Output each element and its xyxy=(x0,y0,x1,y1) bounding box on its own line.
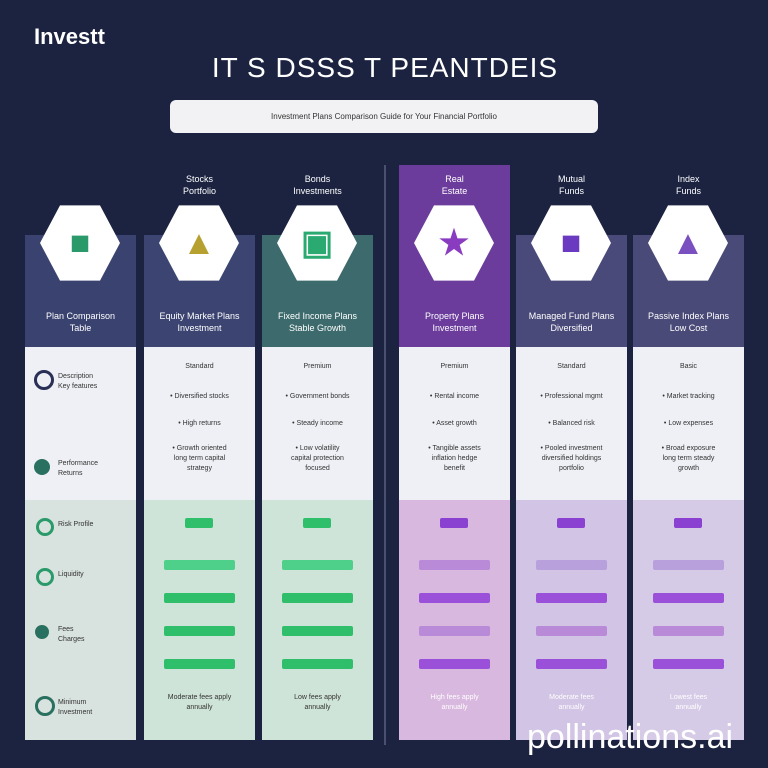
panel: column 2: focused xyxy=(305,465,330,472)
panel: column 3: ★ xyxy=(439,224,469,262)
panel: column 2: ▣ xyxy=(301,224,333,262)
panel: column 2: Bonds xyxy=(305,174,330,184)
panel: column 1 xyxy=(144,174,255,740)
panel: column 3: High fees apply xyxy=(430,694,479,701)
panel: column 3: Investment xyxy=(432,323,477,333)
panel: column 1: long term capital xyxy=(174,455,225,462)
panel: column 4: ■ xyxy=(561,224,581,262)
panel: column 5: ▲ xyxy=(671,224,705,262)
panel: column 2: • Government bonds xyxy=(286,393,349,400)
panel: column 3: Estate xyxy=(442,186,467,196)
panel: column 4: annually xyxy=(558,704,585,711)
panel: column 4: Moderate fees xyxy=(549,694,594,701)
panel: column 5: Funds xyxy=(676,186,701,196)
panel: column 4: Managed Fund Plans xyxy=(529,311,614,321)
panel: column 2: capital protection xyxy=(291,455,344,462)
panel: column 5: Index xyxy=(677,174,700,184)
panel: column 0 labels: Charges xyxy=(58,636,84,643)
panel: column 2: Low fees apply xyxy=(294,694,341,701)
panel: column 5: Basic xyxy=(680,363,697,370)
panel: column 4: Funds xyxy=(559,186,584,196)
panel: column 0 labels: Returns xyxy=(58,470,83,477)
panel: column 5: Low Cost xyxy=(670,323,707,333)
panel: column 1: annually xyxy=(186,704,213,711)
panel: column 2: annually xyxy=(304,704,331,711)
panel: column 1: Moderate fees apply xyxy=(168,694,231,701)
panel: column 5: • Low expenses xyxy=(664,420,713,427)
logo: Investt xyxy=(34,24,105,49)
panel: column 4: Diversified xyxy=(550,323,592,333)
panel: column 1: Stocks xyxy=(186,174,213,184)
panel: column 2: • Low volatility xyxy=(295,445,340,452)
panel: column 0 labels: Minimum xyxy=(58,699,86,706)
panel: column 0 labels: Liquidity xyxy=(58,571,84,578)
panel: column 0 labels: Description xyxy=(58,373,93,380)
panel: column 5: long term steady xyxy=(663,455,714,462)
panel: column 3: Real xyxy=(445,174,464,184)
panel: column 2: Fixed Income Plans xyxy=(278,311,357,321)
panel: column 1: • Diversified stocks xyxy=(170,393,229,400)
panel: column 5 xyxy=(633,174,744,740)
panel: column 2: Investments xyxy=(293,186,342,196)
panel: column 3: annually xyxy=(441,704,468,711)
panel: column 4: • Pooled investment xyxy=(540,445,602,452)
panel: column 4 xyxy=(516,174,627,740)
panel: column 2 xyxy=(262,174,373,740)
panel: column 4: • Professional mgmt xyxy=(540,393,603,400)
panel: column 4: • Balanced risk xyxy=(548,420,595,427)
panel: column 5: annually xyxy=(675,704,702,711)
panel: column 0 labels: Risk Profile xyxy=(58,521,93,528)
panel: column 1: ▲ xyxy=(182,224,216,262)
icons left xyxy=(34,370,54,390)
panel: column 4: portfolio xyxy=(559,465,584,472)
panel: column 1: • Growth oriented xyxy=(172,445,227,452)
panel: column 3: • Rental income xyxy=(430,393,479,400)
panel: column 1: strategy xyxy=(187,465,212,472)
panel: column 0 labels: Key features xyxy=(58,383,97,390)
panel: column 3: Property Plans xyxy=(425,311,484,321)
panel: column 4: diversified holdings xyxy=(542,455,601,462)
panel: column 1: Investment xyxy=(177,323,222,333)
panel: column 2: Stable Growth xyxy=(289,323,346,333)
panel: column 0 labels: Table xyxy=(70,323,91,333)
panel: column 1: Equity Market Plans xyxy=(159,311,240,321)
title: IT S DSSS T PEANTDEIS xyxy=(212,52,558,83)
panel: column 4: Mutual xyxy=(558,174,585,184)
panel: column 5: Lowest fees xyxy=(670,694,707,701)
panel: column 0 labels xyxy=(25,205,136,740)
panel: column 3: inflation hedge xyxy=(432,455,477,462)
panel: column 3 xyxy=(399,165,510,740)
panel: column 0 labels: ■ xyxy=(70,224,90,262)
panel: column 3: benefit xyxy=(444,465,465,472)
panel: column 0 labels: Plan Comparison xyxy=(46,311,115,321)
panel: column 5: growth xyxy=(678,465,699,472)
panel: column 0 labels: Performance xyxy=(58,460,98,467)
panel: column 1: Standard xyxy=(185,363,214,370)
watermark: pollinations.ai xyxy=(527,718,733,756)
panel: column 0 labels: Fees xyxy=(58,626,74,633)
panel: column 1: • High returns xyxy=(178,420,221,427)
panel: column 3: • Asset growth xyxy=(432,420,477,427)
search bar: Investment Plans Comparison Guide for Your Financial Portfolio xyxy=(271,112,497,121)
panel: column 2: • Steady income xyxy=(292,420,343,427)
panel: column 5: • Market tracking xyxy=(662,393,715,400)
panel: column 4: Standard xyxy=(557,363,586,370)
panel: column 5: Passive Index Plans xyxy=(648,311,729,321)
panel: column 3: Premium xyxy=(440,363,468,370)
search bar xyxy=(170,100,598,133)
panel: column 5: • Broad exposure xyxy=(662,445,715,452)
panel: column 3: • Tangible assets xyxy=(428,445,481,452)
panel: column 1: Portfolio xyxy=(183,186,216,196)
panel: column 2: Premium xyxy=(303,363,332,370)
panel: column 0 labels: Investment xyxy=(58,709,92,716)
divider line xyxy=(384,165,386,745)
